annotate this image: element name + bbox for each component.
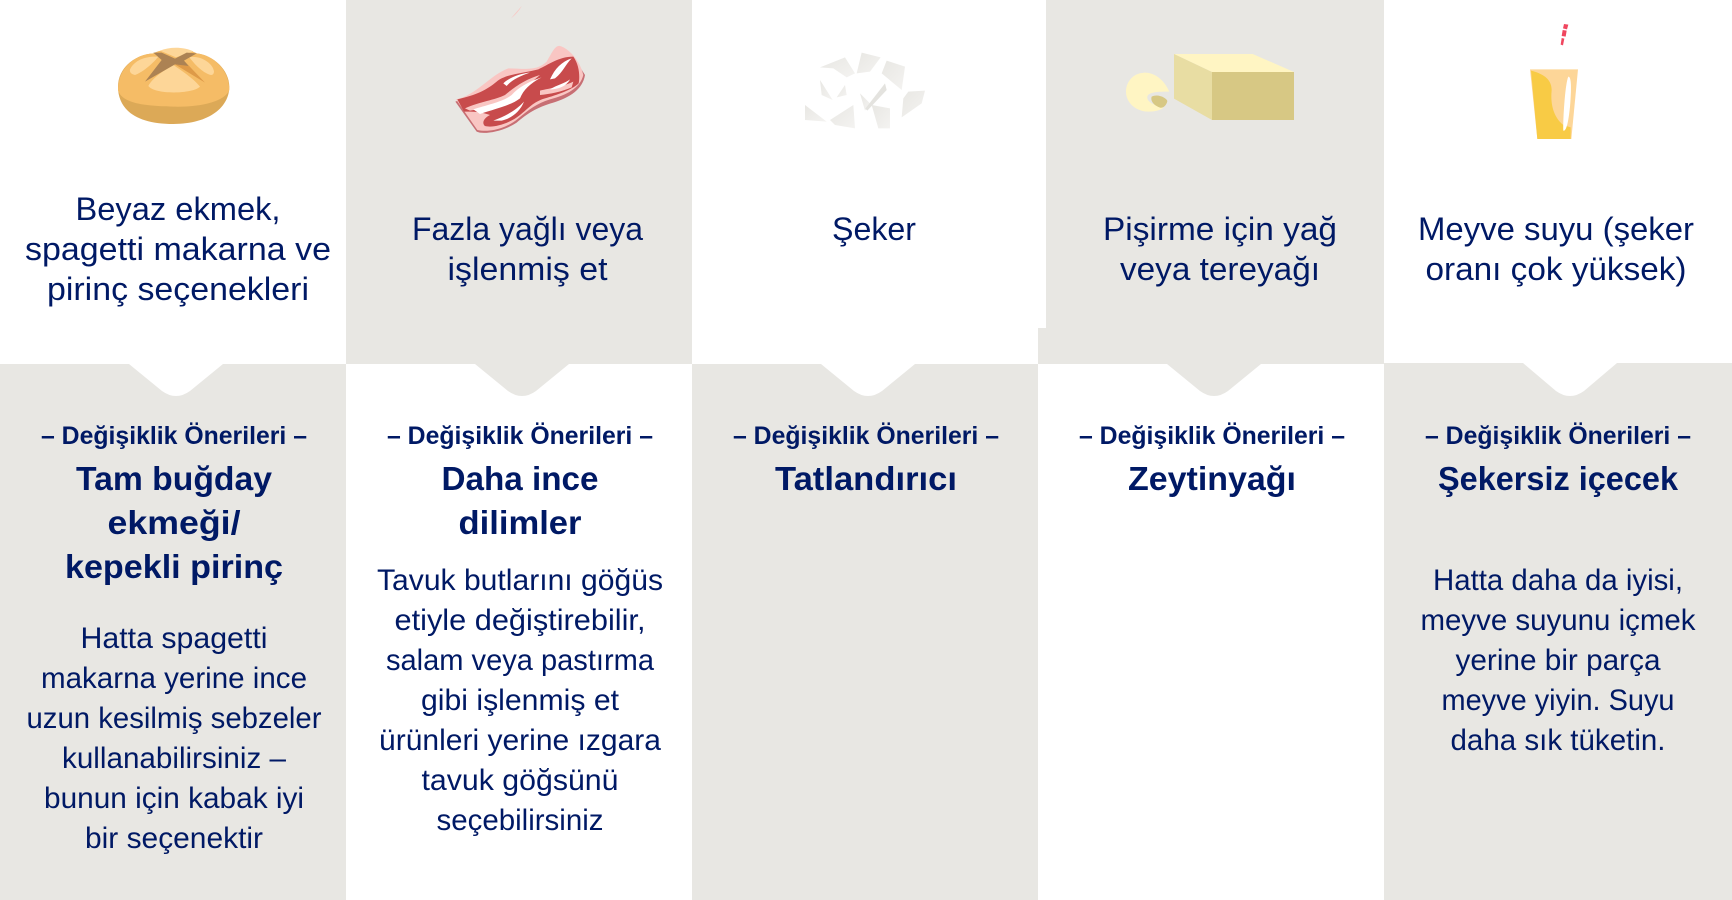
body: column 2: tavuk göğsünü — [422, 764, 618, 797]
body: column 2 — [377, 564, 663, 837]
body: column 1: bunun için kabak iyi — [44, 782, 304, 815]
text block: column 2 suggestion — [377, 421, 663, 837]
subheading: thinner slices — [442, 461, 598, 542]
text block: column 3 suggestion — [733, 421, 999, 498]
icon: bread — [118, 48, 229, 124]
body: column 5: Hatta daha da iyisi, — [1433, 564, 1683, 597]
subheading: whole wheat: ekmeği/ — [108, 505, 240, 542]
subheading: whole wheat: Tam buğday — [76, 461, 272, 498]
text block: column 5 suggestion — [1420, 421, 1696, 757]
icon: butter — [1126, 54, 1294, 120]
subheading: thinner slices: dilimler — [458, 505, 582, 542]
body: column 1: bir seçenektir — [85, 822, 263, 855]
heading: Meyve suyu: Meyve suyu (şeker — [1418, 211, 1694, 247]
heading: Pişirme yağı: veya tereyağı — [1120, 251, 1320, 287]
heading: Beyaz ekmek: Beyaz ekmek, — [76, 191, 280, 227]
panel: column 1 lower — [0, 364, 346, 900]
body: column 2: gibi işlenmiş et — [421, 684, 620, 717]
body: column 2: Tavuk butlarını göğüs — [377, 564, 663, 597]
label: suggestions 3: – Değişiklik Önerileri – — [733, 421, 999, 450]
subheading: sweetener: Tatlandırıcı — [775, 461, 957, 498]
body: column 1: Hatta spagetti — [80, 622, 268, 655]
label: suggestions 4: – Değişiklik Önerileri – — [1079, 421, 1345, 450]
heading: Beyaz ekmek: pirinç seçenekleri — [47, 271, 309, 307]
text block: column 1 suggestion — [26, 421, 322, 855]
body: column 5: daha sık tüketin. — [1450, 724, 1666, 757]
subheading: thinner slices: Daha ince — [442, 461, 598, 498]
label: suggestions 2: – Değişiklik Önerileri – — [387, 421, 653, 450]
icon: juice glass — [1530, 24, 1578, 139]
icon: sugar cubes — [805, 53, 925, 128]
body: column 2: etiyle değiştirebilir, — [394, 604, 646, 637]
heading: Meyve suyu — [1418, 211, 1694, 287]
heading: Pişirme yağı — [1103, 211, 1337, 287]
heading: Beyaz ekmek — [25, 191, 331, 307]
panel: column 3 lower — [692, 364, 1038, 900]
subheading: olive oil: Zeytinyağı — [1128, 461, 1296, 498]
body: column 5 — [1420, 564, 1696, 757]
heading: Fazla yağlı et — [412, 211, 644, 287]
panel: column 5 lower — [1384, 363, 1732, 900]
subheading: whole wheat: kepekli pirinç — [65, 549, 283, 586]
heading: Meyve suyu: oranı çok yüksek) — [1426, 251, 1686, 287]
icon: bacon — [455, 6, 585, 133]
body: column 1: kullanabilirsiniz – — [62, 742, 286, 775]
body: column 1: uzun kesilmiş sebzeler — [26, 702, 322, 735]
panel: column 4 upper — [1038, 0, 1384, 396]
panel: column 2 upper — [346, 0, 692, 396]
heading: Şeker: Şeker — [832, 211, 916, 247]
body: column 5: meyve suyunu içmek — [1420, 604, 1696, 637]
subheading: sugar free drink: Şekersiz içecek — [1438, 461, 1678, 498]
text block: column 4 suggestion — [1079, 421, 1345, 498]
heading: Pişirme yağı: Pişirme için yağ — [1103, 211, 1337, 247]
heading: Beyaz ekmek: spagetti makarna ve — [25, 231, 331, 267]
body: column 5: meyve yiyin. Suyu — [1442, 684, 1674, 717]
label: suggestions 5: – Değişiklik Önerileri – — [1425, 421, 1691, 450]
body: column 1: makarna yerine ince — [41, 662, 307, 695]
subheading: whole wheat — [65, 461, 283, 586]
label: suggestions 1: – Değişiklik Önerileri – — [41, 421, 307, 450]
body: column 1 — [26, 622, 322, 855]
body: column 2: salam veya pastırma — [386, 644, 654, 677]
body: column 5: yerine bir parça — [1456, 644, 1661, 677]
body: column 2: ürünleri yerine ızgara — [379, 724, 661, 757]
heading: Fazla yağlı et: Fazla yağlı veya — [412, 211, 644, 247]
body: column 2: seçebilirsiniz — [436, 804, 604, 837]
heading: Fazla yağlı et: işlenmiş et — [448, 251, 608, 287]
